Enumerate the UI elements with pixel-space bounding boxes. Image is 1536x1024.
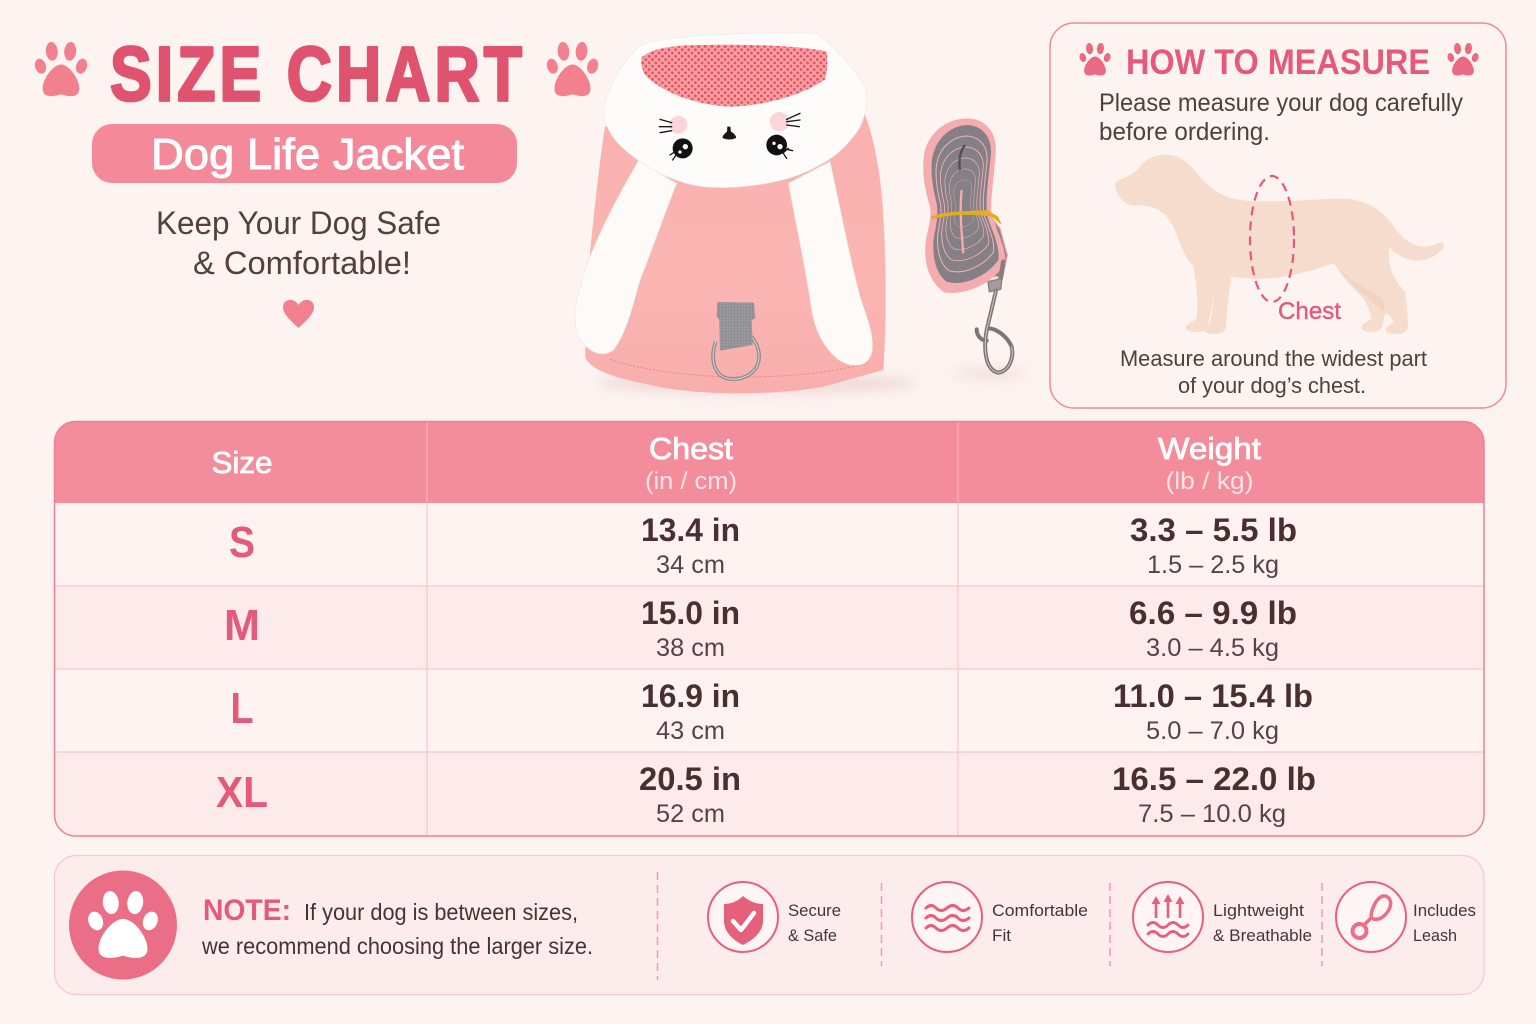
table header: [54, 422, 1484, 503]
bunny face: [659, 112, 800, 160]
jacket body: [585, 115, 886, 393]
hood collar: [603, 33, 866, 188]
instruction: before ordering.: [1099, 118, 1270, 146]
row: L: 11.0 – 15.4 lb: [1113, 678, 1313, 714]
panel: how to measure: [1050, 23, 1506, 408]
heading: HOW TO MEASURE: [1126, 43, 1430, 82]
header: chest: Chest: [649, 431, 733, 466]
feature: lightweight and breathable: Lightweight: [1213, 901, 1304, 920]
row: XL: [216, 761, 1316, 828]
row: M: [224, 595, 1297, 662]
title: SIZE CHART: [110, 32, 526, 118]
instruction: [1099, 89, 1463, 146]
feature: includes leash: Leash: [1413, 926, 1457, 945]
header block: [33, 32, 600, 328]
header: chest: (in / cm): [645, 468, 737, 495]
header: weight: (lb / kg): [1166, 468, 1254, 495]
row: S: S: [229, 518, 255, 567]
note text: [201, 894, 593, 959]
tagline: [156, 205, 441, 281]
row: L: 43 cm: [656, 717, 725, 745]
hem stitch: [610, 359, 860, 377]
feature: comfortable fit: [912, 882, 1088, 952]
note text: we recommend choosing the larger size.: [201, 933, 593, 959]
feature: secure and safe: [708, 882, 841, 952]
table outline: [54, 422, 1484, 836]
note text: If your dog is between sizes,: [304, 899, 578, 925]
row: M: 15.0 in: [641, 595, 740, 631]
tagline: Keep Your Dog Safe: [156, 205, 441, 241]
row: XL: 16.5 – 22.0 lb: [1112, 761, 1316, 797]
row: L: 5.0 – 7.0 kg: [1146, 717, 1279, 745]
icon: heart: [283, 300, 314, 328]
chest measuring loop: [1250, 176, 1294, 302]
feature: includes leash: [1336, 882, 1476, 952]
row: L: L: [230, 684, 254, 733]
product: leash: [923, 118, 1027, 379]
icon: left title paw: [33, 41, 89, 96]
D-ring: [713, 337, 759, 379]
row: S: 3.3 – 5.5 lb: [1130, 512, 1297, 548]
panel: footer note and features: [54, 856, 1484, 994]
note text: NOTE:: [203, 894, 291, 927]
table rows background: [54, 422, 1484, 836]
mesh lining: [641, 45, 827, 107]
chest label: Chest: [1278, 298, 1341, 325]
feature: secure and safe: Secure: [788, 901, 841, 920]
icon: left measure paw: [1078, 43, 1112, 75]
row: S: 34 cm: [656, 551, 725, 579]
row: XL: 52 cm: [656, 800, 725, 828]
row: M: 3.0 – 4.5 kg: [1146, 634, 1279, 662]
tagline: & Comfortable!: [193, 245, 411, 281]
left ear: [575, 161, 677, 354]
row: M: 38 cm: [656, 634, 725, 662]
leash shadow: [953, 367, 1027, 379]
right ear: [788, 162, 872, 365]
leash coil: [923, 118, 1005, 293]
icon: right title paw: [545, 41, 600, 96]
row: XL: 20.5 in: [639, 761, 741, 797]
row: L: [230, 678, 1313, 745]
header: chest: [645, 431, 737, 495]
leash tail: [991, 217, 1007, 277]
feature: comfortable fit: Comfortable: [992, 901, 1088, 920]
header: weight: Weight: [1158, 431, 1261, 466]
feature: includes leash: Includes: [1413, 901, 1476, 920]
size table: [54, 421, 1484, 836]
instruction: Please measure your dog carefully: [1099, 89, 1463, 117]
row: M: 6.6 – 9.9 lb: [1129, 595, 1297, 631]
row: S: 1.5 – 2.5 kg: [1147, 551, 1279, 579]
row: S: [229, 512, 1297, 579]
header: size: Size: [212, 445, 272, 480]
row: S: 13.4 in: [641, 512, 740, 548]
gold tie: [931, 210, 1002, 225]
subtitle pill: [92, 124, 517, 183]
measuring note: [1120, 346, 1427, 398]
subtitle pill: Dog Life Jacket: [151, 130, 464, 179]
header: weight: [1158, 431, 1261, 495]
feature: comfortable fit: Fit: [992, 926, 1011, 945]
product: jacket: [575, 33, 917, 395]
leash clip: [977, 262, 1012, 373]
row: XL: 7.5 – 10.0 kg: [1138, 800, 1286, 828]
icon: right measure paw: [1446, 43, 1480, 75]
row: L: 16.9 in: [641, 678, 740, 714]
measuring note: Measure around the widest part: [1120, 346, 1427, 371]
webbing strap: [717, 302, 755, 351]
feature: lightweight and breathable: & Breathable: [1213, 926, 1312, 945]
jacket shadow: [597, 372, 917, 395]
feature: lightweight and breathable: [1133, 882, 1312, 952]
row: M: M: [224, 601, 260, 650]
feature: secure and safe: & Safe: [788, 926, 837, 945]
dog silhouette: [1115, 155, 1444, 334]
row: XL: XL: [216, 768, 268, 817]
measuring note: of your dog’s chest.: [1178, 373, 1366, 398]
icon: paw badge: [69, 870, 177, 980]
